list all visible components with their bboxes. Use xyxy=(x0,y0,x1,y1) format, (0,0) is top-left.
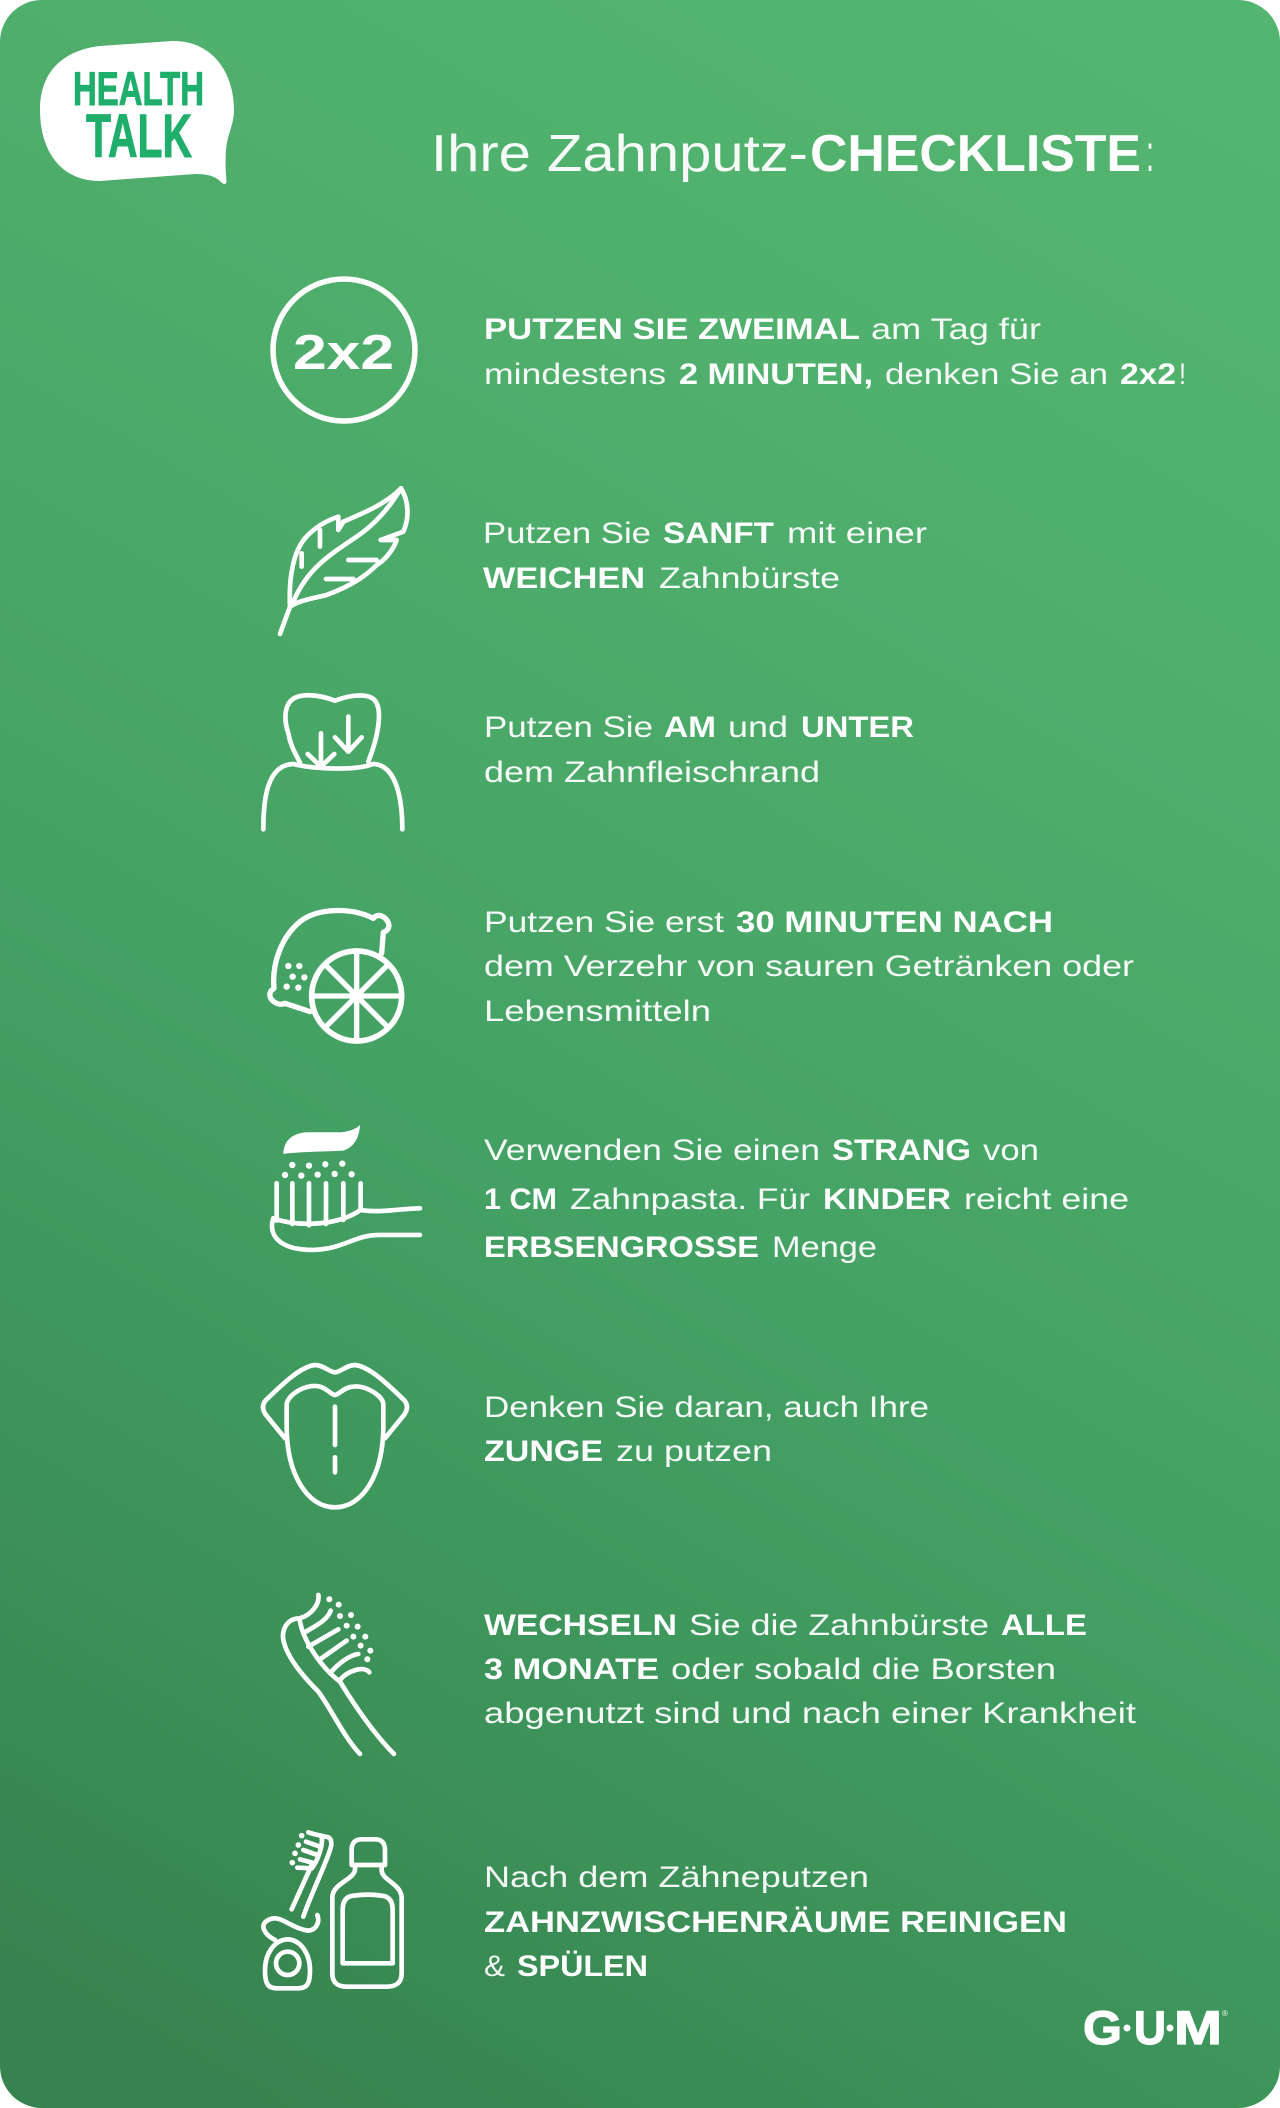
text: replace every 3 months: WECHSELN xyxy=(484,1609,677,1642)
text: brush twice a day: ! xyxy=(1179,358,1186,391)
logo: GUM: G xyxy=(1083,2001,1122,2054)
text: replace every 3 months: ALLE xyxy=(1001,1609,1087,1642)
text: replace every 3 months: Sie die Zahnbürste xyxy=(689,1609,989,1642)
text: wait 30 minutes: 30 MINUTEN NACH xyxy=(736,906,1053,939)
text: brush twice a day: am Tag für xyxy=(871,313,1041,346)
text: brush gently: mit einer xyxy=(787,517,927,550)
text: interdental cleaning and rinsing: Nach dem Zähneputzen xyxy=(484,1861,869,1894)
text: brush gently: SANFT xyxy=(663,517,774,550)
text: replace every 3 months: 3 MONATE xyxy=(484,1653,659,1686)
text: clean the tongue xyxy=(484,1391,929,1468)
icon: 2x2 circle: 2x2 xyxy=(293,326,394,380)
text: clean the tongue: Denken Sie daran, auch Ihre xyxy=(484,1391,929,1424)
text: wait 30 minutes xyxy=(484,906,1134,1028)
text: brush at the gumline: AM xyxy=(664,711,716,744)
text: brush gently: Putzen Sie xyxy=(483,517,651,550)
text: brush twice a day: 2 MINUTEN, xyxy=(679,358,873,391)
logo: Health Talk speech bubble xyxy=(40,41,234,184)
title: Ihre Zahnputz- xyxy=(431,125,808,183)
text: interdental cleaning and rinsing xyxy=(484,1861,1067,1983)
text: amount of toothpaste: Menge xyxy=(772,1231,877,1264)
logo: Health Talk speech bubble: TALK xyxy=(86,102,192,170)
icon: tongue xyxy=(263,1365,407,1507)
logo: GUM: M xyxy=(1174,2001,1222,2054)
text: wait 30 minutes: dem Verzehr von sauren Getränken oder xyxy=(484,950,1134,983)
text: brush twice a day: denken Sie an xyxy=(885,358,1108,391)
icon: toothbrush with paste xyxy=(272,1125,420,1250)
text: wait 30 minutes: Putzen Sie erst xyxy=(484,906,725,939)
text: brush twice a day: PUTZEN SIE ZWEIMAL xyxy=(484,313,860,346)
text: brush gently xyxy=(483,517,927,595)
text: wait 30 minutes: Lebensmitteln xyxy=(484,995,711,1028)
icon: feather leaf xyxy=(280,488,408,634)
text: interdental cleaning and rinsing: SPÜLEN xyxy=(517,1950,648,1983)
text: brush twice a day: mindestens xyxy=(484,358,666,391)
icon: tooth with arrows xyxy=(263,695,402,829)
text: brush twice a day xyxy=(484,313,1186,391)
text: amount of toothpaste: KINDER xyxy=(823,1183,951,1216)
logo: GUM xyxy=(1083,2001,1228,2054)
text: amount of toothpaste: reicht eine xyxy=(964,1183,1129,1216)
text: amount of toothpaste xyxy=(484,1134,1129,1264)
text: brush twice a day: 2x2 xyxy=(1120,358,1176,391)
icon: 2x2 circle xyxy=(273,279,415,421)
title: : xyxy=(1146,125,1154,183)
text: amount of toothpaste: Verwenden Sie einen xyxy=(484,1134,820,1167)
text: brush at the gumline: und xyxy=(728,711,788,744)
text: amount of toothpaste: ERBSENGROSSE xyxy=(484,1231,759,1264)
text: clean the tongue: ZUNGE xyxy=(484,1435,603,1468)
text: clean the tongue: zu putzen xyxy=(616,1435,772,1468)
text: brush gently: WEICHEN xyxy=(483,562,645,595)
text: interdental cleaning and rinsing: & xyxy=(484,1950,505,1983)
text: interdental cleaning and rinsing: ZAHNZWISCHENRÄUME REINIGEN xyxy=(484,1906,1067,1939)
title: CHECKLISTE xyxy=(810,125,1141,183)
title xyxy=(431,125,1154,183)
logo: GUM: ® xyxy=(1222,2009,1228,2018)
text: amount of toothpaste: 1 CM xyxy=(484,1183,557,1216)
icon: worn toothbrush xyxy=(283,1595,394,1754)
text: brush at the gumline xyxy=(484,711,914,789)
logo: Health Talk speech bubble: HEALTH xyxy=(73,62,204,115)
icon: lemon xyxy=(270,911,402,1041)
text: amount of toothpaste: von xyxy=(983,1134,1039,1167)
icon: brush, floss and mouthwash xyxy=(263,1832,402,1988)
text: replace every 3 months: abgenutzt sind und nach einer Krankheit xyxy=(484,1697,1137,1730)
text: brush gently: Zahnbürste xyxy=(659,562,840,595)
text: brush at the gumline: dem Zahnfleischrand xyxy=(484,756,820,789)
text: brush at the gumline: Putzen Sie xyxy=(484,711,653,744)
logo: GUM: U xyxy=(1134,2001,1166,2054)
text: brush at the gumline: UNTER xyxy=(801,711,914,744)
text: replace every 3 months xyxy=(484,1609,1137,1730)
text: replace every 3 months: oder sobald die Borsten xyxy=(671,1653,1056,1686)
text: amount of toothpaste: STRANG xyxy=(832,1134,971,1167)
text: amount of toothpaste: Zahnpasta. Für xyxy=(570,1183,810,1216)
